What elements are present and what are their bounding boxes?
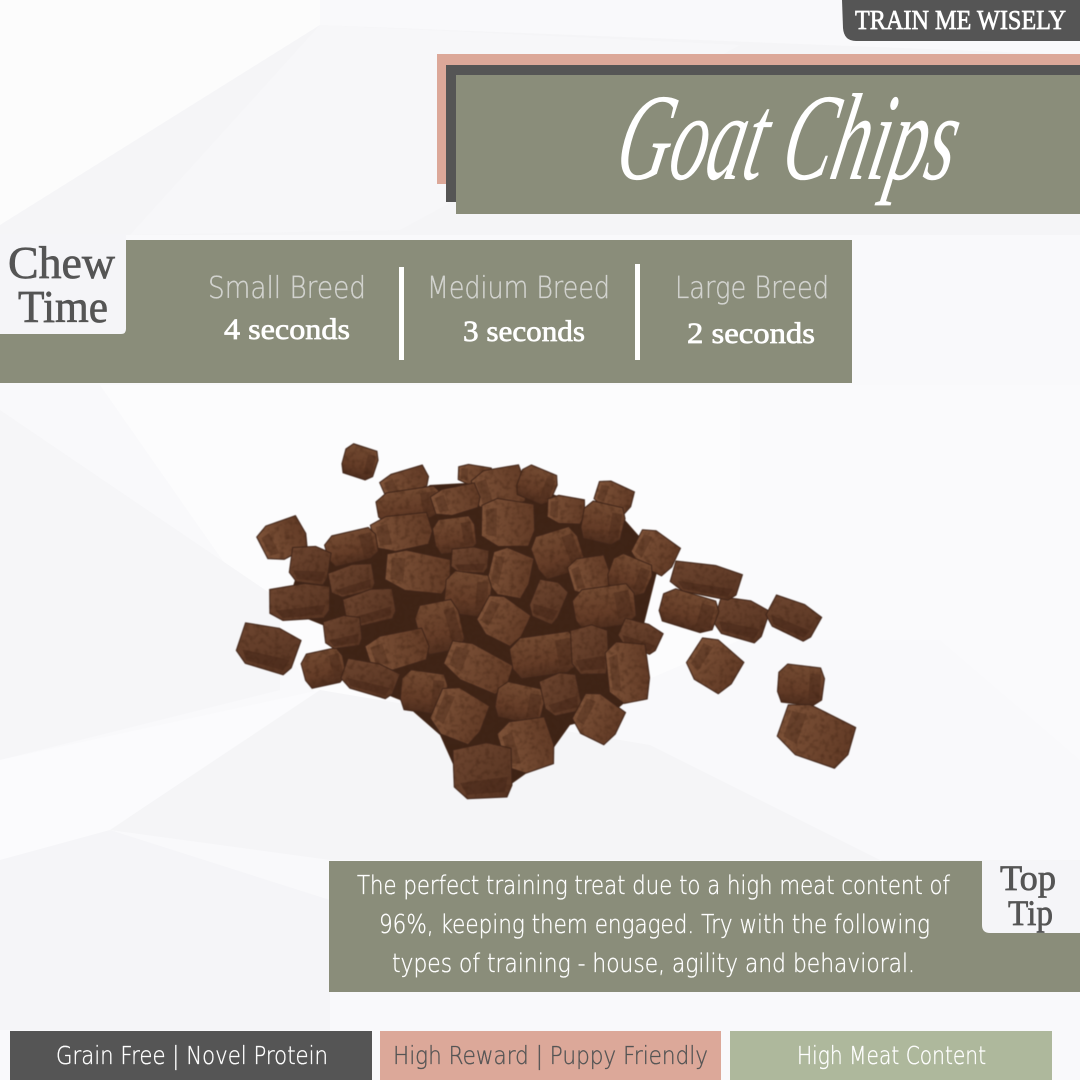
panel: top tip [329, 858, 1080, 992]
medium breed: 3 seconds [463, 315, 585, 348]
chew time label: Chew [8, 237, 116, 288]
tag: grain free: Grain Free | Novel Protein [56, 1041, 328, 1070]
image: pile of goat chips [233, 442, 860, 802]
panel: chew time [0, 234, 852, 383]
top tip text: 96%, keeping them engaged. Try with the following [379, 910, 930, 940]
small breed: Small Breed [208, 271, 366, 306]
medium breed: Medium Breed [427, 271, 610, 306]
large breed [675, 271, 829, 350]
top tip text: The perfect training treat due to a high meat content of [357, 871, 951, 901]
top tip label: Top [1000, 858, 1056, 898]
large breed: 2 seconds [687, 317, 815, 350]
tag: high meat content [730, 1031, 1052, 1080]
small breed [208, 271, 366, 346]
chew time label [0, 234, 126, 334]
tag: high reward [380, 1031, 721, 1080]
header tab: brand [842, 0, 1080, 41]
top tip label: Tip [1008, 893, 1053, 933]
chew time label: Time [18, 281, 108, 332]
large breed: Large Breed [675, 271, 829, 306]
top tip text: types of training - house, agility and behavioral. [392, 949, 915, 979]
small breed: 4 seconds [224, 313, 350, 346]
tag: high reward: High Reward | Puppy Friendly [393, 1041, 708, 1070]
tag: grain free [10, 1031, 372, 1080]
top tip text [357, 871, 951, 979]
tag: high meat content: High Meat Content [797, 1041, 986, 1070]
title banner [437, 54, 1080, 214]
medium breed [427, 271, 610, 348]
top tip label [982, 858, 1080, 933]
